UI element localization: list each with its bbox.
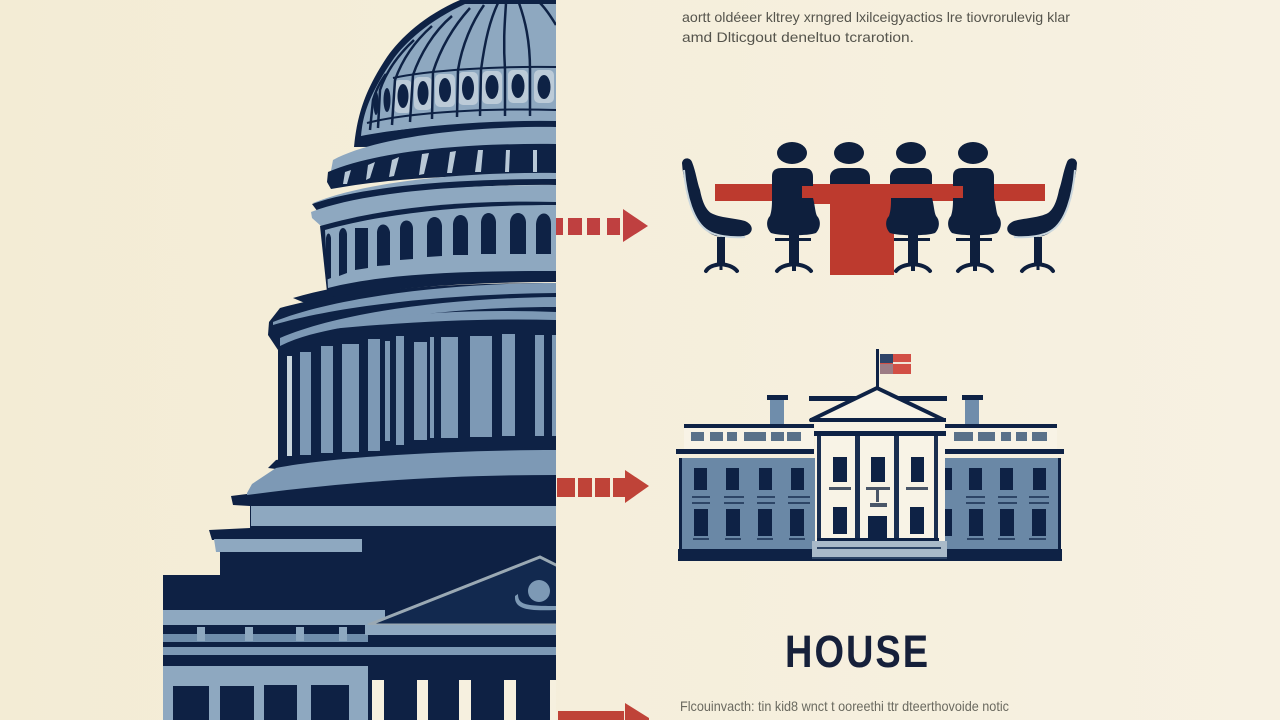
capitol base terraces (163, 450, 556, 720)
icon: committee table with chairs (682, 142, 1077, 275)
top description text: aortt oldéeer kltrey xrngred lxilceigyactios lre tiovrorulevig klar (682, 9, 1070, 25)
capitol building half illustration (163, 0, 590, 720)
portico columns (372, 680, 556, 720)
arrow: to white house (557, 470, 649, 503)
top description text (682, 9, 1070, 45)
left wing (679, 458, 815, 550)
central portico (810, 388, 947, 559)
arched window ring (293, 202, 556, 303)
top description text: amd Dlticgout deneltuo tcrarotion. (682, 29, 914, 45)
seated figures behind table (777, 142, 988, 185)
dome (354, 0, 556, 147)
red table (715, 184, 1045, 275)
columned drum (268, 283, 556, 472)
right wing (945, 458, 1061, 550)
lower wing with windows (163, 610, 556, 720)
window frames (394, 70, 554, 113)
chimneys (767, 395, 983, 424)
bottom description text: Flcouinvacth: tin kid8 wnct t ooreethi ttr dteerthovoide notic (680, 698, 1009, 714)
arrow: to committee table (556, 209, 648, 242)
arrow: to bottom text (558, 703, 649, 720)
icon: white house (676, 349, 1064, 561)
heading: HOUSE: HOUSE (785, 626, 930, 677)
portico pediment (365, 555, 556, 635)
ground plinth (678, 549, 1062, 561)
flag (876, 349, 911, 387)
attic storeys (676, 424, 1064, 454)
dome drum with windows (311, 127, 556, 226)
